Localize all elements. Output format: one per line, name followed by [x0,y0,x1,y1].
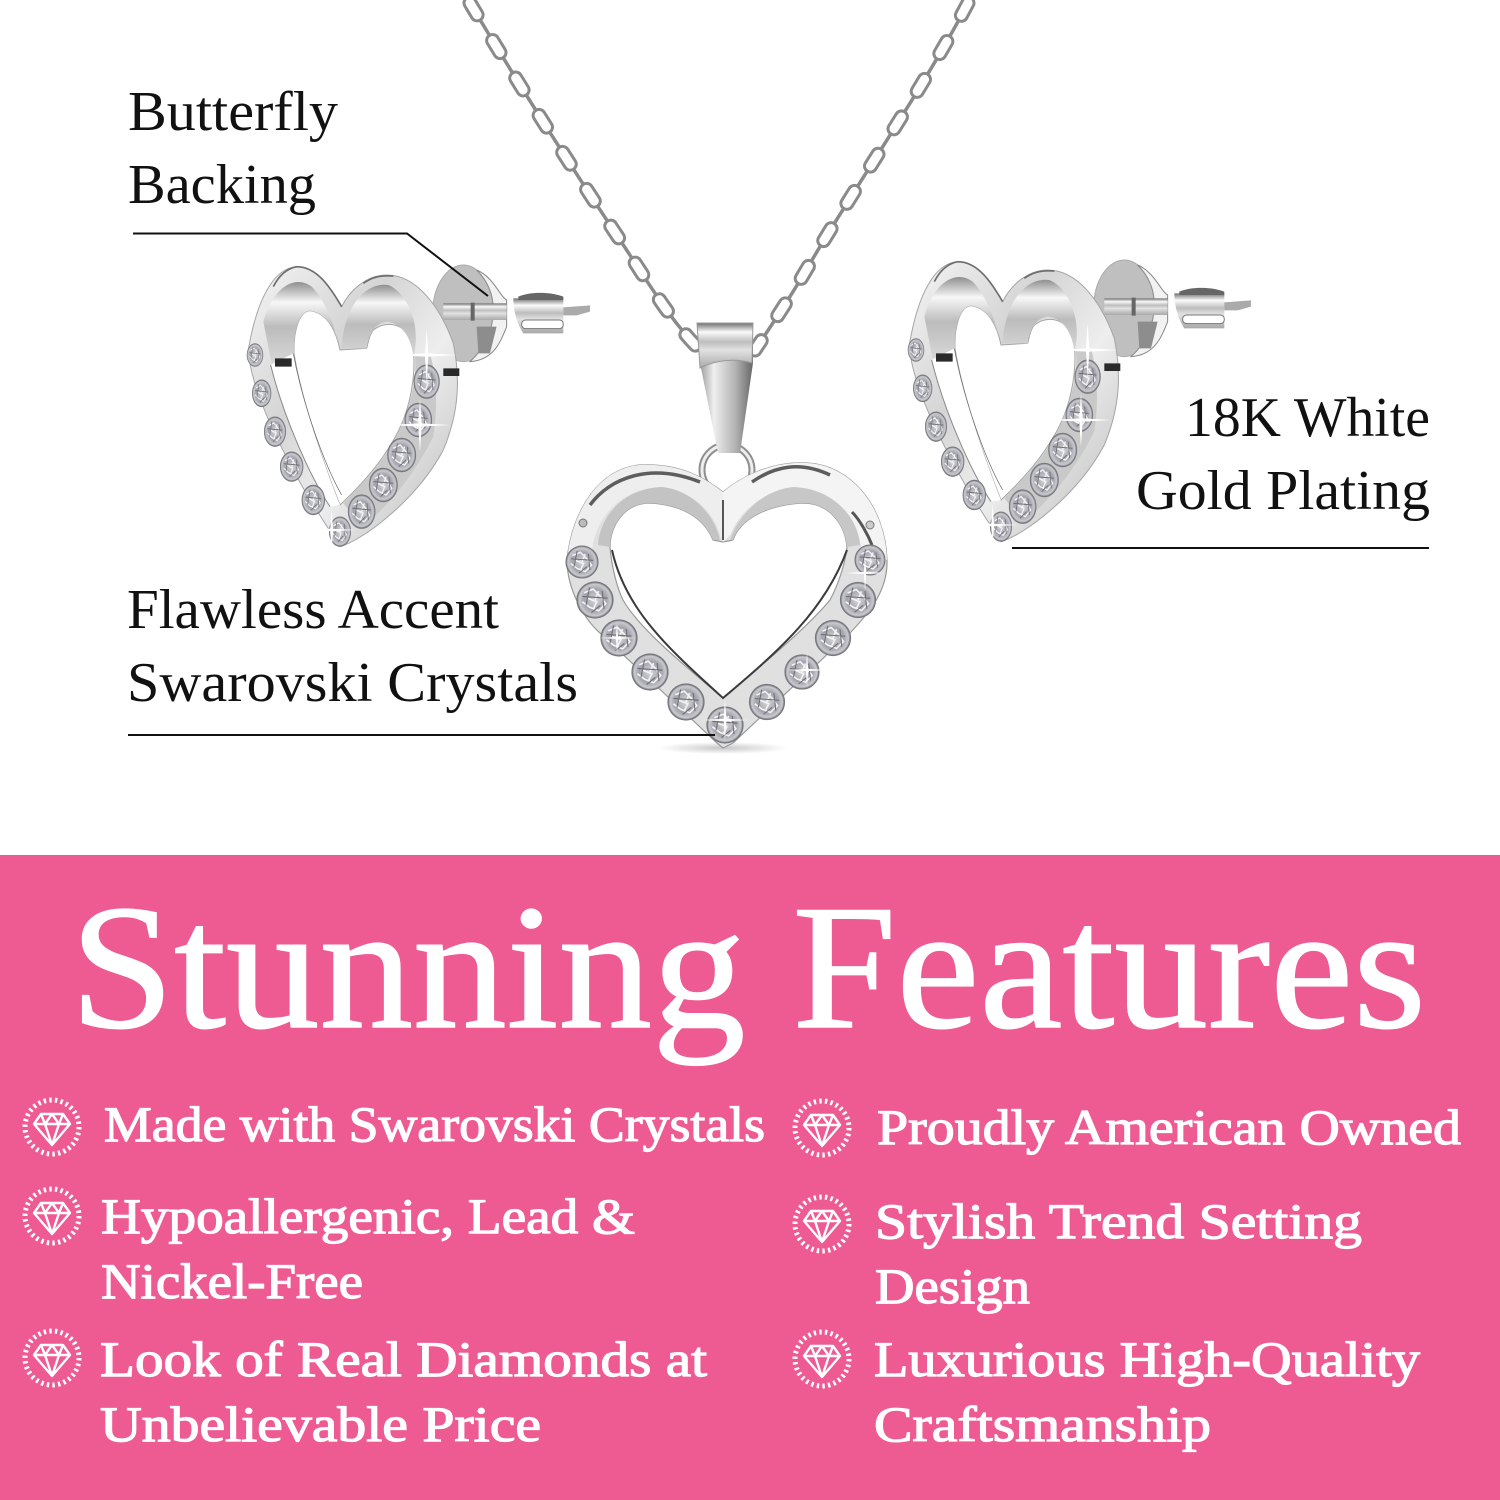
leader line: plating [1012,547,1429,549]
label: swarovski crystals [127,579,578,714]
label: 18K white gold plating: Gold Plating [1136,460,1430,522]
feature: american owned: Proudly American Owned [877,1099,1461,1155]
feature: stylish: Design [875,1258,1030,1314]
feature: stylish: Stylish Trend Setting [875,1193,1362,1249]
label: butterfly backing [128,81,338,216]
label: swarovski crystals: Flawless Accent [127,579,499,641]
necklace chain [470,3,968,350]
feature: craftsmanship [795,1331,1420,1452]
feature: real diamonds: Unbelievable Price [100,1396,541,1452]
right earring [908,260,1251,546]
feature: craftsmanship: Luxurious High-Quality [874,1331,1420,1387]
heart pendant [566,323,887,754]
leader line: crystals [128,734,715,736]
label: butterfly backing: Butterfly [128,81,338,143]
leader line: butterfly backing [133,234,488,296]
label: butterfly backing: Backing [128,154,316,216]
label: 18K white gold plating [1136,387,1430,522]
feature: real diamonds: Look of Real Diamonds at [100,1331,707,1387]
feature: hypoallergenic: Hypoallergenic, Lead & [101,1188,635,1244]
left earring [247,265,590,551]
feature: craftsmanship: Craftsmanship [874,1396,1211,1452]
panel: stunning features [0,855,1500,1500]
heading: Stunning Features [70,868,1426,1066]
feature: hypoallergenic: Nickel-Free [101,1253,363,1309]
feature: swarovski: Made with Swarovski Crystals [104,1096,765,1152]
label: 18K white gold plating: 18K White [1185,387,1430,449]
feature: stylish [795,1193,1362,1314]
feature: real diamonds [25,1331,707,1452]
label: swarovski crystals: Swarovski Crystals [127,652,578,714]
white product area [0,0,1500,855]
feature: hypoallergenic [25,1188,635,1309]
